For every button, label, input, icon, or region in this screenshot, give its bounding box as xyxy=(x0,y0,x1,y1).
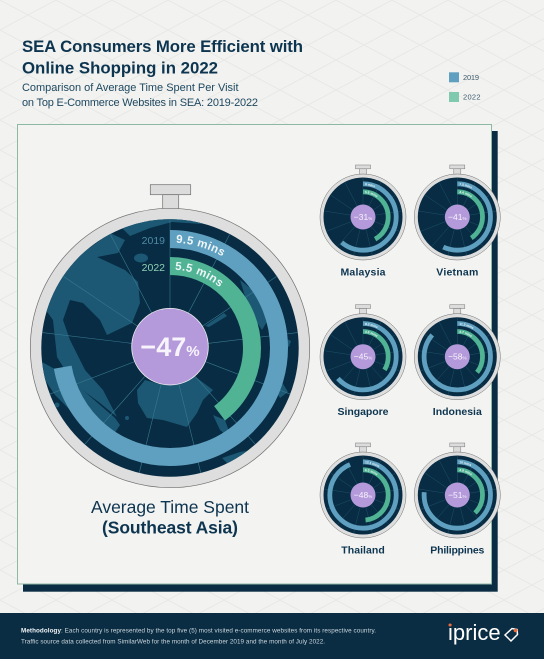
stopwatch: Malaysia: Malaysia xyxy=(340,267,386,279)
legend xyxy=(449,72,480,102)
ring year labels: 2022 xyxy=(142,262,165,274)
dial spokes xyxy=(42,220,298,473)
stopwatch: Vietnam: −41% xyxy=(448,212,467,222)
centre percentage xyxy=(132,308,208,385)
methodology note: Traffic source data collected from SimilarWeb for the month of December 2019 and the month of July 2022. xyxy=(21,638,325,646)
stopwatch: Vietnam: Vietnam xyxy=(436,267,478,279)
stopwatch: Singapore: −45% xyxy=(354,352,372,362)
stopwatch: Indonesia: −58% xyxy=(448,352,467,362)
stopwatch: Vietnam: 7.5 mins xyxy=(460,183,472,188)
main label: (Southeast Asia) xyxy=(102,518,238,538)
ring value labels xyxy=(175,234,224,286)
title: SEA Consumers More Efficient with xyxy=(22,37,303,56)
methodology note xyxy=(21,628,376,646)
methodology note: Methodology: Each country is represented by the top five (5) most visited e-commerce websites from its respective country. xyxy=(21,628,376,634)
stopwatch: Singapore: 4.5 mins xyxy=(365,330,378,337)
stopwatch case xyxy=(30,208,310,488)
ring value labels: 5.5 mins xyxy=(175,262,222,286)
main label xyxy=(91,497,249,538)
iprice logo: iprice xyxy=(448,620,501,645)
footer bar xyxy=(0,613,544,659)
map of Southeast Asia xyxy=(30,210,291,464)
stopwatch: Malaysia: −31% xyxy=(354,212,372,222)
stopwatch dial xyxy=(41,219,299,477)
stopwatch: Vietnam: 4.4 mins xyxy=(459,191,472,198)
stopwatch: Philippines: −51% xyxy=(448,490,467,500)
stopwatch: Malaysia: 8 mins xyxy=(365,183,376,188)
stopwatch: Philippines: 10 mins xyxy=(460,461,472,466)
panel shadow xyxy=(23,131,498,592)
stopwatch: Thailand: Thailand xyxy=(341,545,385,557)
stopwatch crown xyxy=(150,185,191,210)
stopwatch: Indonesia: 4.7 mins xyxy=(459,330,472,337)
legend: 2019 xyxy=(463,73,479,82)
stopwatch: Singapore: 8.2 mins xyxy=(365,322,378,328)
main stopwatch: Southeast Asia xyxy=(30,184,310,488)
stopwatch: Philippines: 4.9 mins xyxy=(459,469,472,476)
ring year labels: 2019 xyxy=(142,235,165,247)
stopwatch: Singapore xyxy=(320,304,406,418)
main label: Average Time Spent xyxy=(91,497,249,517)
stopwatch: Thailand: 6.3 mins xyxy=(365,469,378,476)
stopwatch: Thailand xyxy=(320,442,406,557)
main panel xyxy=(18,124,492,584)
stopwatch: Singapore: Singapore xyxy=(338,406,389,418)
subtitle: Comparison of Average Time Spent Per Visit xyxy=(22,82,238,94)
ring year labels xyxy=(142,235,165,274)
stopwatch: Malaysia xyxy=(320,164,406,279)
centre percentage: −47% xyxy=(140,332,200,362)
legend: 2022 xyxy=(463,92,480,102)
stopwatch: Thailand: 12.1 mins xyxy=(365,461,380,468)
stopwatch: Philippines xyxy=(414,442,501,557)
stopwatch: Indonesia: 11.2 mins xyxy=(460,322,474,329)
2022 ring: 5.5 mins xyxy=(88,266,252,430)
title xyxy=(22,37,303,78)
ring value labels: 9.5 mins xyxy=(176,234,224,256)
subtitle xyxy=(22,82,258,109)
stopwatch: Malaysia: 5.5 mins xyxy=(365,191,378,198)
stopwatch: Philippines: Philippines xyxy=(430,545,484,557)
2019 ring: 9.5 mins xyxy=(61,239,279,457)
stopwatch: Indonesia xyxy=(414,304,501,418)
stopwatch: Vietnam xyxy=(414,164,501,279)
stopwatch: Indonesia: Indonesia xyxy=(433,406,482,418)
title: Online Shopping in 2022 xyxy=(22,58,218,78)
stopwatch: Thailand: −48% xyxy=(354,490,372,500)
subtitle: on Top E-Commerce Websites in SEA: 2019-2022 xyxy=(22,97,258,109)
